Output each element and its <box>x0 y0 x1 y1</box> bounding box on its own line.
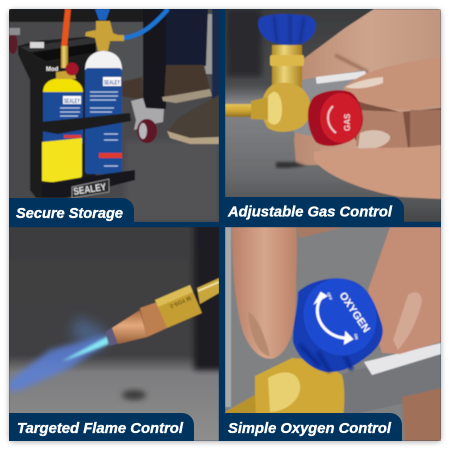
knob label: OXYGEN <box>337 290 372 335</box>
middle finger <box>356 110 408 154</box>
white label <box>364 343 441 375</box>
blue knob: OFF <box>326 292 334 301</box>
left thumb <box>232 227 297 359</box>
trolley leg <box>143 9 166 109</box>
right finger <box>368 227 441 354</box>
grey cylinder body <box>340 345 441 416</box>
stamped nut text: M YOS-2 <box>169 294 192 309</box>
wrinkle shadow <box>335 55 368 72</box>
workshop floor background <box>9 9 219 222</box>
caption: simple oxygen control: Simple Oxygen Control <box>228 421 392 437</box>
bracket straps <box>41 113 131 134</box>
blurred background <box>9 227 219 441</box>
knob label: GAS <box>343 113 352 131</box>
panel: simple oxygen control <box>225 227 441 441</box>
caption: targeted flame control: Targeted Flame Control <box>17 421 184 437</box>
caption: adjustable gas control <box>225 197 404 225</box>
blue knob <box>291 266 389 372</box>
brass tube <box>197 278 219 304</box>
dark gap under thumb <box>354 101 441 148</box>
blue knob: ON <box>353 333 359 340</box>
caption: secure storage: Secure Storage <box>16 206 123 222</box>
panel: targeted flame control <box>9 220 224 441</box>
sealey plate: SEALEY <box>73 182 107 198</box>
operator trousers <box>166 9 208 66</box>
oxygen valve <box>85 21 124 51</box>
knob arrow <box>317 298 350 338</box>
back boot <box>122 65 211 102</box>
top skin <box>296 227 345 238</box>
caption: targeted flame control <box>9 413 194 441</box>
brass valve body <box>225 358 344 416</box>
storage bracket back plate <box>18 36 96 198</box>
model text: Mod <box>46 67 59 73</box>
blurred background <box>225 9 441 222</box>
dark clip on bench <box>276 162 306 168</box>
oxygen canister: SEALEY <box>104 80 120 86</box>
thumb <box>343 57 441 110</box>
grey background <box>225 227 441 441</box>
index finger <box>314 145 441 199</box>
hand back <box>294 9 441 165</box>
caption: adjustable gas control: Adjustable Gas Control <box>227 204 393 220</box>
gas canister <box>42 78 83 182</box>
brass outlet pipe <box>225 104 253 117</box>
caster wheel <box>131 98 164 143</box>
blue knob <box>258 14 316 45</box>
panel: adjustable gas control <box>225 9 441 222</box>
gas canister: SEALEY <box>64 99 80 105</box>
label sticker <box>30 42 44 48</box>
oxygen canister <box>85 51 122 174</box>
trolley rail <box>9 9 149 22</box>
panel: secure storage <box>8 9 219 222</box>
brass stem <box>272 45 302 90</box>
gas hose <box>64 9 68 48</box>
knob arrow <box>328 106 336 133</box>
copper cone <box>112 310 147 344</box>
caption: secure storage <box>9 198 134 225</box>
oxygen hose <box>120 9 168 38</box>
gas valve <box>56 46 78 79</box>
nozzle <box>105 326 120 346</box>
brass body <box>262 83 311 132</box>
background hand skin <box>402 388 441 441</box>
copper hex <box>140 302 167 337</box>
front boot <box>168 95 219 140</box>
small back caster <box>8 34 18 54</box>
blue flame <box>9 334 108 392</box>
caption: simple oxygen control <box>225 413 402 441</box>
red knob <box>308 90 363 146</box>
grey cylinder <box>293 70 366 136</box>
hex nut <box>155 285 202 328</box>
